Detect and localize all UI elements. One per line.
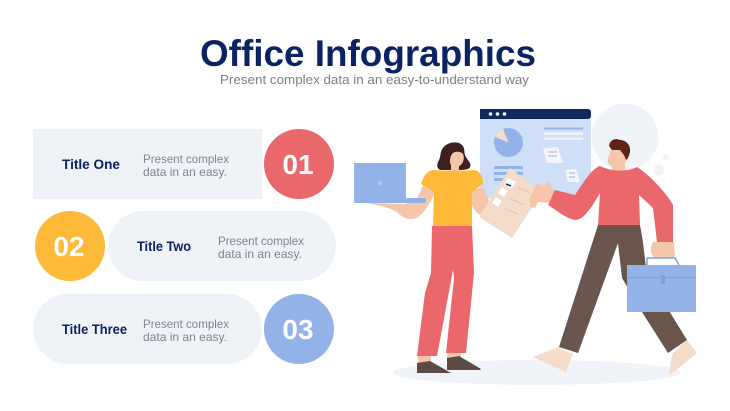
badge: 02 — [35, 211, 105, 281]
woman right arm — [470, 187, 490, 216]
man hand — [530, 181, 555, 208]
heading: title three: Title Three — [62, 322, 127, 337]
man head and neck — [608, 148, 627, 175]
badge: 02: 02 — [53, 231, 85, 262]
trousers — [417, 226, 474, 356]
shoes — [417, 356, 481, 373]
text: description two: data in an easy. — [218, 247, 302, 261]
ankles — [418, 353, 461, 363]
text: description three: Present complex — [143, 317, 229, 331]
dashboard window — [480, 109, 591, 198]
panel: item one — [33, 129, 334, 199]
back shoe — [533, 347, 573, 372]
heading: title one: Title One — [62, 157, 120, 172]
shirt — [421, 170, 483, 226]
woman left arm — [368, 183, 435, 219]
woman neck and face — [447, 152, 464, 177]
man sweater — [548, 166, 673, 242]
briefcase — [627, 258, 696, 312]
badge: 03 — [264, 294, 334, 364]
badge: 01 — [264, 129, 334, 199]
front shoe — [670, 340, 697, 375]
title: Office Infographics — [200, 33, 536, 74]
text: description one: Present complex — [143, 152, 229, 166]
woman — [354, 142, 490, 373]
man hand on handle — [651, 242, 675, 259]
pie chart — [494, 128, 523, 157]
man hair — [609, 139, 630, 160]
subtitle: Present complex data in an easy-to-understand way — [220, 72, 530, 87]
text: description three: data in an easy. — [143, 330, 227, 344]
ground shadow — [393, 360, 681, 385]
badge: 03: 03 — [282, 314, 314, 345]
man — [530, 139, 697, 375]
text: description two: Present complex — [218, 234, 304, 248]
hair — [437, 142, 470, 170]
laptop — [354, 163, 426, 203]
man trousers — [559, 225, 687, 353]
heading: title two: Title Two — [137, 239, 191, 254]
badge: 01: 01 — [282, 149, 314, 180]
panel: item two — [35, 211, 336, 281]
panel: item three — [33, 294, 334, 364]
clipboard document — [479, 168, 542, 238]
text: description one: data in an easy. — [143, 165, 227, 179]
illustration: office workers — [354, 104, 697, 385]
background circles — [592, 104, 668, 176]
